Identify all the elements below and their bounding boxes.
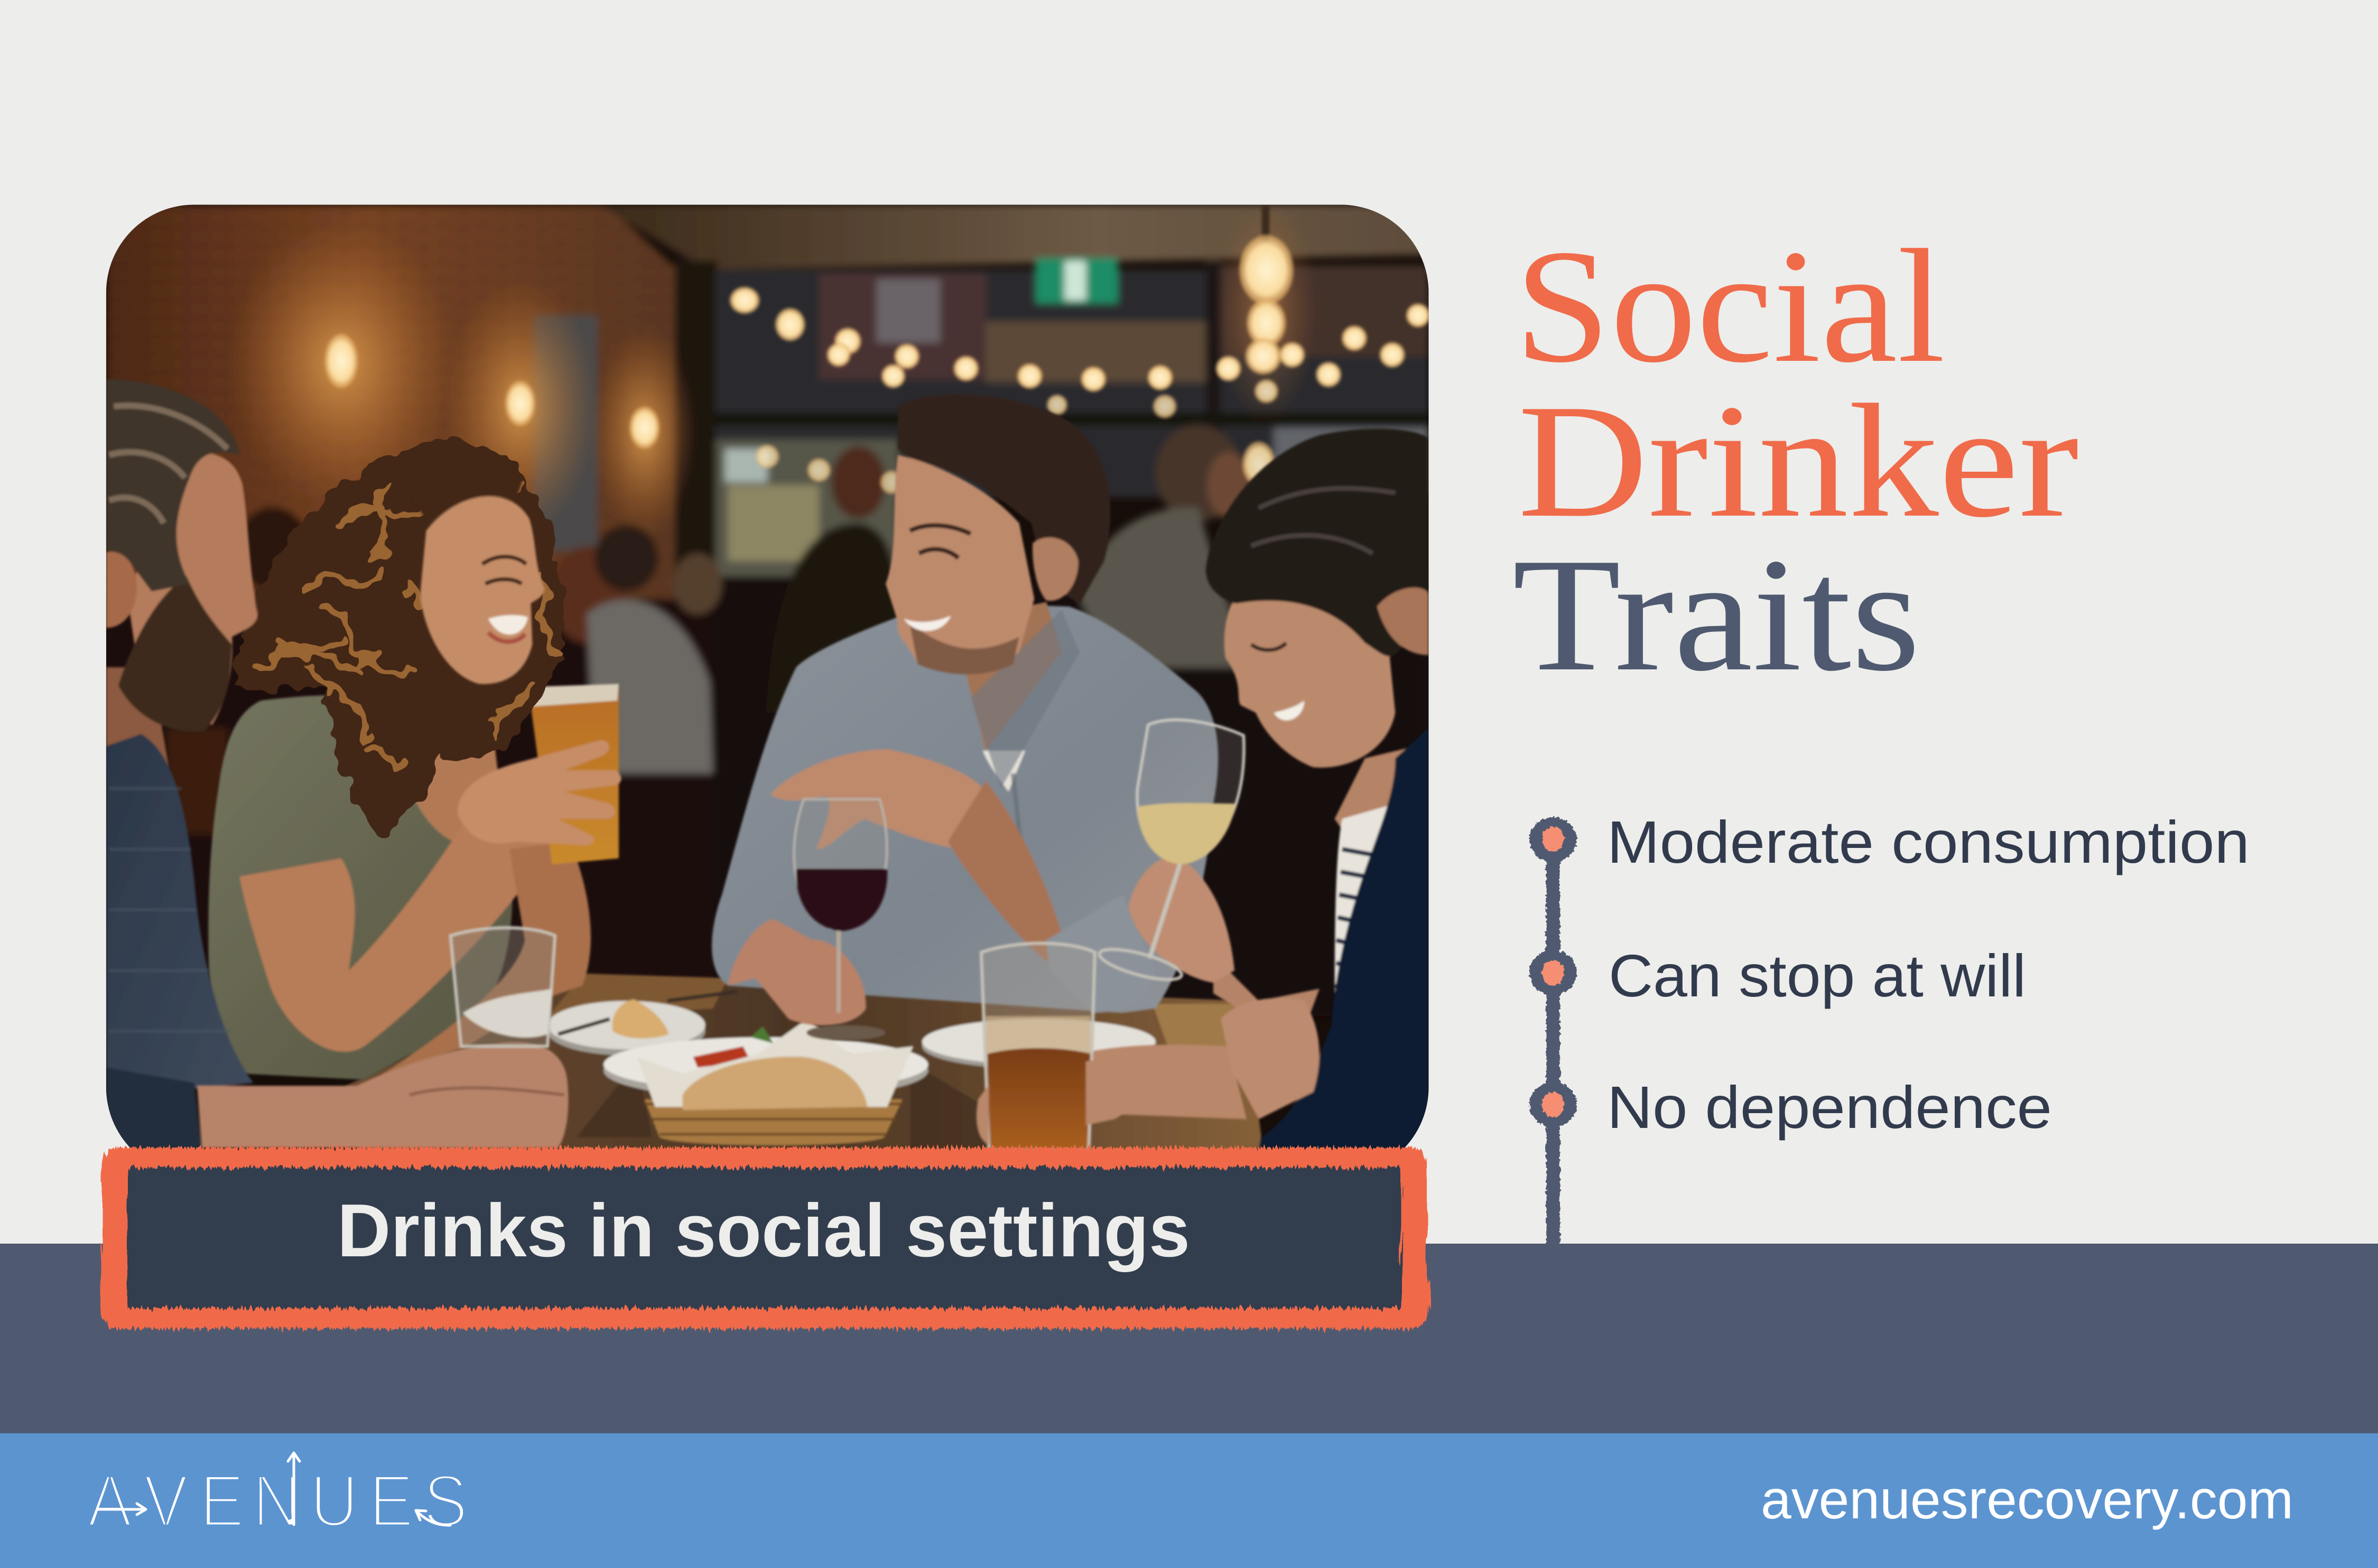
woman with curly hair and beer	[208, 667, 621, 1080]
timeline dot 1	[1529, 817, 1577, 862]
timeline dot 3	[1529, 1082, 1577, 1127]
logo wordmark: AVENUES	[88, 1460, 468, 1542]
caption banner	[101, 1147, 1428, 1329]
slate band	[0, 1244, 2378, 1434]
title	[1512, 216, 2079, 705]
white wine glass	[1097, 720, 1244, 986]
title line: Drinker: Drinker	[1518, 371, 2079, 551]
timeline dot 2	[1529, 950, 1577, 995]
man in grey shirt	[712, 395, 1218, 1025]
banner dark panel	[127, 1168, 1401, 1308]
woman with short dark hair	[1080, 428, 1428, 1175]
title line: Traits: Traits	[1512, 525, 1920, 705]
curly hair	[232, 440, 565, 834]
trait list	[1607, 809, 2250, 1141]
beer glass, right	[977, 943, 1136, 1150]
red wine glass	[794, 799, 887, 1040]
string lights and lamps	[324, 205, 1430, 494]
woman's face	[413, 455, 544, 684]
footer bar	[0, 1433, 2378, 1568]
timeline vertical line	[1546, 856, 1560, 1247]
timeline with dots	[1529, 817, 1577, 1247]
title line: Social: Social	[1515, 216, 1945, 396]
empty beer glass, left	[450, 928, 555, 1047]
blurred pub background	[106, 197, 1428, 1016]
banner orange frame	[101, 1147, 1428, 1329]
website url: avenuesrecovery.com	[1761, 1469, 2293, 1530]
Avenues logo	[88, 1453, 468, 1542]
man with beard in foreground	[106, 379, 568, 1153]
table with plates and food	[346, 972, 1263, 1151]
trait: moderate consumption: Moderate consumption	[1607, 809, 2250, 875]
trait: no dependence: No dependence	[1607, 1074, 2052, 1141]
logo arrows	[97, 1453, 450, 1525]
photo: friends drinking at a pub table	[106, 197, 1430, 1175]
banner caption text: Drinks in social settings	[337, 1189, 1190, 1273]
trait: can stop at will: Can stop at will	[1609, 942, 2026, 1009]
